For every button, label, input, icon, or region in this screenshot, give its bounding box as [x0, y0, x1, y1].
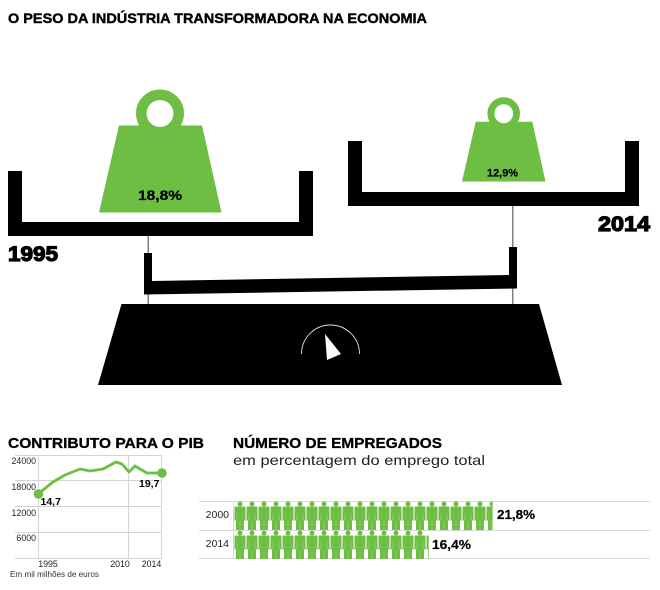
subheading: em percentagem do emprego total: [233, 452, 485, 468]
line chart: [12, 455, 167, 569]
line chart: 12000: [12, 508, 36, 518]
line chart: 24000: [12, 456, 36, 466]
line chart: 19,7: [139, 478, 160, 490]
row 2000: 2000: [206, 509, 229, 521]
heading: CONTRIBUTO PARA O PIB: [8, 436, 204, 452]
title: O PESO DA INDÚSTRIA TRANSFORMADORA NA ECONOMIA: [8, 9, 427, 26]
panel: 1995 pan: [8, 95, 313, 266]
tilted beam: [144, 247, 517, 294]
line chart: 2010: [110, 559, 130, 569]
heading: NÚMERO DE EMPREGADOS: [233, 434, 442, 452]
row 2014: [206, 530, 471, 559]
line chart: 14,7: [40, 496, 61, 508]
row 2000: [206, 502, 535, 530]
pictogram chart: [199, 501, 650, 559]
line chart: 18000: [12, 482, 36, 492]
panel: 2014 pan: [348, 101, 650, 236]
scale base: [98, 304, 562, 385]
row 2014: 16,4%: [432, 537, 471, 552]
left pan: [8, 171, 313, 236]
right pan: [348, 141, 639, 206]
right hanger rod: [512, 206, 514, 304]
weight: 12,9%: [462, 101, 546, 182]
dial: [302, 325, 360, 360]
row 2014: 2014: [206, 538, 229, 550]
scale: balance illustration: [98, 206, 562, 385]
panel: contributo para o PIB: [8, 436, 204, 579]
row 2000: 21,8%: [497, 507, 535, 522]
chart note: Em mil milhões de euros: [10, 570, 99, 579]
line chart: 6000: [16, 533, 36, 543]
line chart: 2014: [142, 559, 161, 569]
line chart: 1995: [38, 559, 58, 569]
panel: número de empregados: [199, 434, 650, 559]
year label 1995: 1995: [8, 243, 58, 266]
left hanger rod: [148, 236, 149, 304]
weight: 18,8%: [99, 95, 222, 212]
year label 2014: 2014: [598, 213, 650, 236]
weight: 18,8%: 18,8%: [138, 187, 183, 203]
weight: 12,9%: 12,9%: [487, 168, 518, 180]
